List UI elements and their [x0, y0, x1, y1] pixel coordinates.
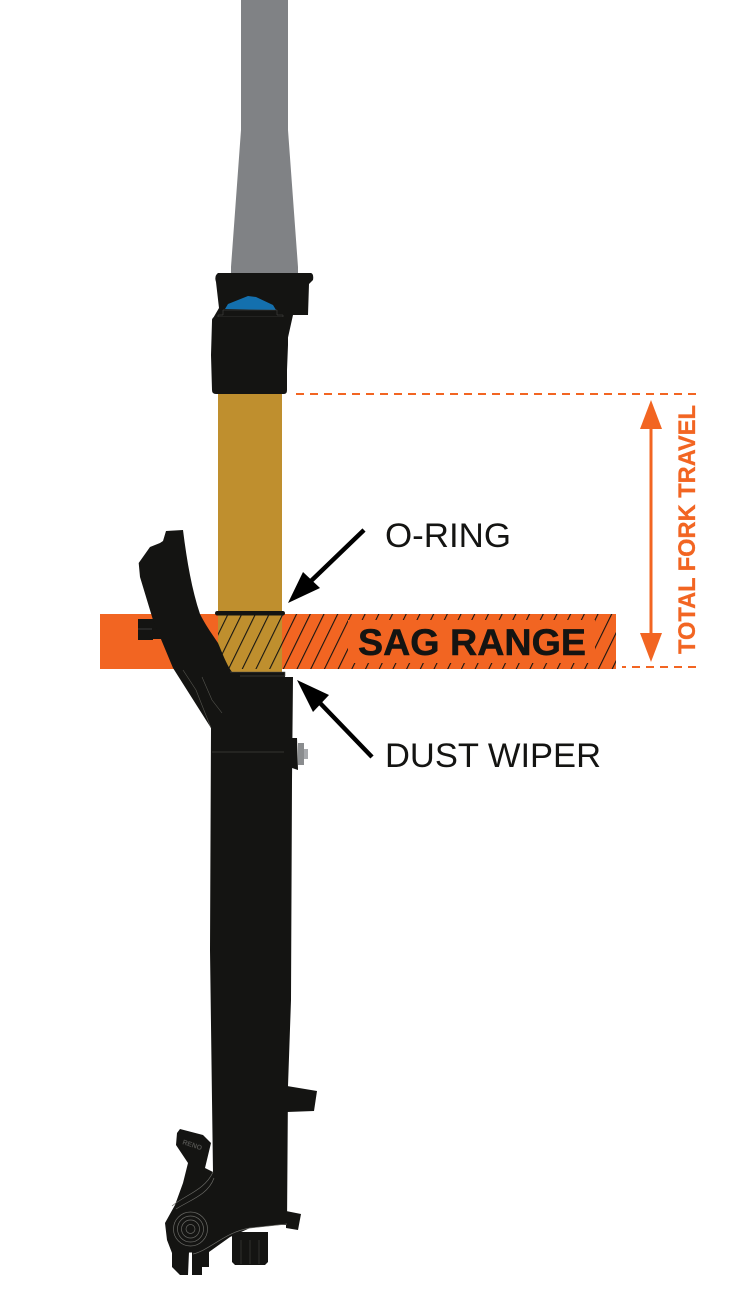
sag range band — [100, 614, 616, 669]
crown and upper seal — [211, 273, 313, 394]
o-ring — [215, 611, 285, 616]
quick release — [172, 1139, 287, 1275]
steerer tube — [231, 0, 298, 274]
stanchion — [218, 392, 282, 672]
arrow: total fork travel — [640, 400, 662, 662]
label: total fork travel: TOTAL FORK TRAVEL — [674, 405, 701, 654]
arrow: o-ring — [288, 530, 364, 603]
lower leg tabs — [286, 1086, 317, 1230]
dashed guide: top of travel — [290, 393, 696, 395]
bolt on lower leg — [292, 738, 308, 770]
sag range hatching — [218, 614, 616, 669]
dashed guide: bottom of travel — [622, 666, 696, 668]
arrow: dust wiper — [297, 680, 372, 757]
fork arch and lower leg — [139, 530, 293, 1253]
label backing — [348, 620, 595, 663]
bolt on arch — [138, 619, 161, 640]
label: o-ring: O-RING — [385, 517, 511, 555]
label: sag range: SAG RANGE — [358, 622, 586, 663]
lever label: RENO — [181, 1139, 203, 1152]
axle knob — [232, 1232, 268, 1265]
icon: blue adjuster — [225, 296, 276, 310]
arch detail lines — [183, 670, 285, 752]
label: dust wiper: DUST WIPER — [385, 737, 601, 775]
